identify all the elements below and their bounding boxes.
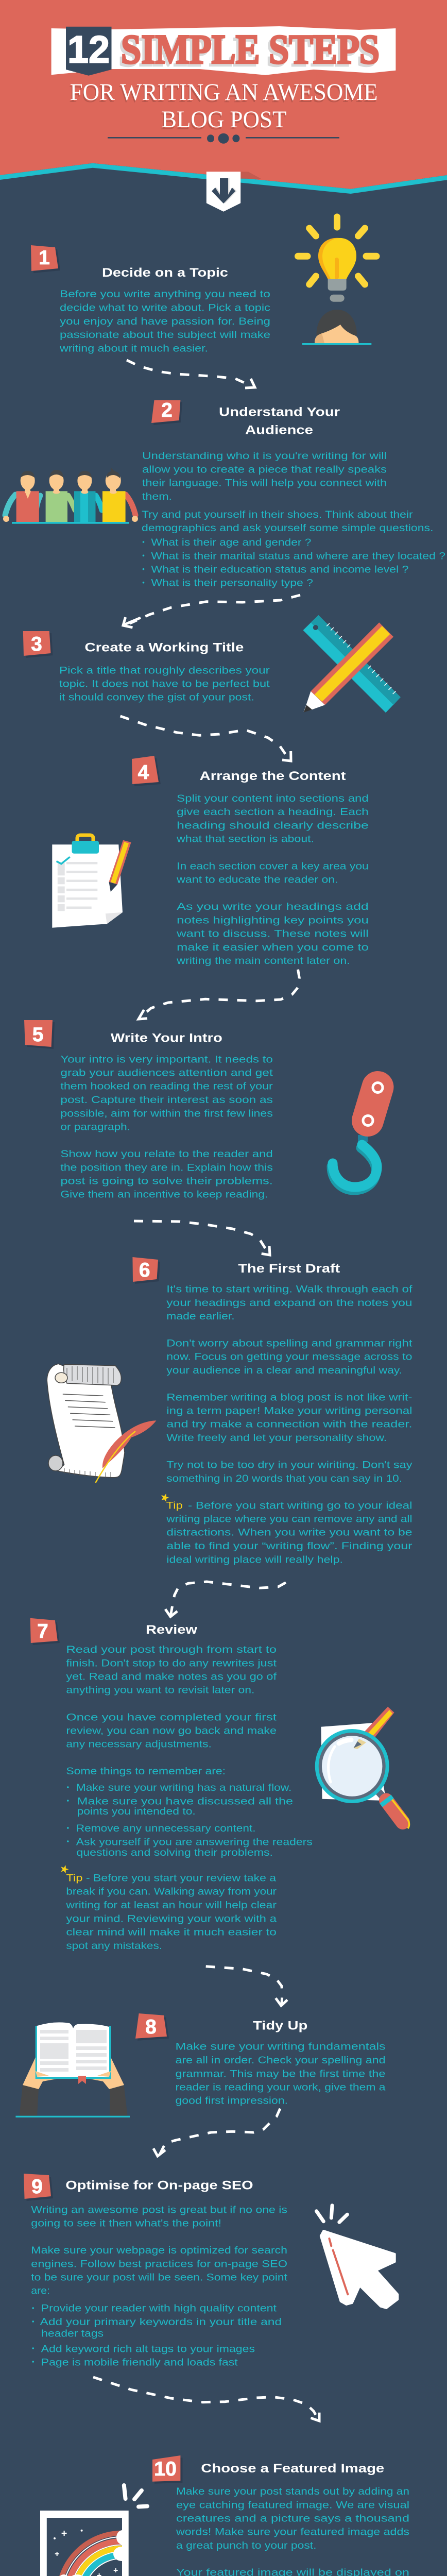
body 1: you enjoy and have passion for. Being — [60, 316, 270, 327]
body 9: Make sure your webpage is optimized for search — [31, 2245, 287, 2256]
badge 5: 5 — [32, 1024, 43, 1046]
body 4: want to educate the reader on. — [176, 874, 338, 886]
body 6: Write freely and let your personality show. — [166, 1432, 387, 1444]
body 6 — [166, 1283, 412, 1484]
heading 10: Choose a Featured Image — [201, 2462, 384, 2476]
body 5: them hooked on reading the rest of your — [60, 1081, 273, 1092]
badge 6 — [132, 1257, 160, 1284]
header divider — [108, 133, 339, 144]
tip 7: clear mind will make it much easier to — [66, 1927, 277, 1938]
body 9: going to see it then what's the point! — [31, 2218, 221, 2229]
body 8: reader is reading your work, give them a — [175, 2081, 386, 2093]
body 7: yet. Read and make notes as you go of — [66, 1671, 277, 1683]
body 7: Remove any unnecessary content. — [76, 1823, 256, 1834]
body 4: As you write your headings add — [177, 901, 369, 912]
heading 2 — [219, 405, 340, 437]
body 9: Writing an awesome post is great but if no one is — [31, 2204, 287, 2215]
step 6: the first draft — [47, 1257, 412, 1565]
body 4: make it easier when you come to — [177, 942, 369, 953]
heading 5: Write Your Intro — [111, 1031, 222, 1045]
badge 4: 4 — [138, 761, 149, 784]
heading 2: Understand Your — [219, 405, 340, 419]
body 7: review, you can now go back and make — [66, 1725, 277, 1737]
heading 1: Decide on a Topic — [102, 266, 228, 280]
body 3: it should convey the gist of your post. — [59, 692, 254, 703]
body 3: topic. It does not have to be perfect but — [59, 679, 270, 690]
badge 3: 3 — [31, 633, 42, 655]
body 9: header tags — [41, 2328, 104, 2340]
step 9: optimise for on-page seo — [24, 2174, 398, 2368]
badge 2 — [151, 399, 182, 425]
tip 6: writing place where you can remove any and all — [166, 1514, 412, 1525]
body 4: Split your content into sections and — [177, 793, 369, 804]
arrow: step 3 to 4 — [121, 716, 291, 761]
arrow: step 1 to 2 — [127, 360, 255, 388]
icon: star — [160, 1492, 170, 1502]
heading 3: Create a Working Title — [84, 640, 244, 654]
step 3: create a working title — [23, 615, 401, 713]
icon: lightbulb over head — [298, 217, 376, 345]
icon: star — [59, 1864, 70, 1874]
body 2: What is their marital status and where are they located ? — [151, 550, 445, 562]
body 2: What is their education status and income level ? — [151, 564, 409, 575]
body 1: writing about it much easier. — [59, 343, 208, 354]
badge 8: 8 — [145, 2016, 157, 2038]
heading 7: Review — [146, 1623, 197, 1637]
body 3: Pick a title that roughly describes your — [59, 665, 270, 676]
subtitle: BLOG POST — [161, 106, 286, 133]
badge 10 — [152, 2455, 182, 2484]
subtitle: FOR WRITING AN AWESOME — [69, 81, 377, 108]
body 9: Provide your reader with high quality content — [41, 2303, 277, 2314]
body 10: a great punch to your post. — [176, 2540, 316, 2551]
icon: framed rainbow picture — [40, 2483, 149, 2576]
body 9: are: — [31, 2285, 50, 2297]
badge 10: 10 — [154, 2458, 177, 2480]
body 5: grab your audiences attention and get — [60, 1067, 273, 1079]
body 7: anything you want to revisit later on. — [66, 1685, 254, 1696]
icon: ruler and pencil — [303, 615, 401, 713]
title: simple steps: SIMPLE STEPS — [121, 27, 380, 72]
body 7: Make sure your writing has a natural flow. — [76, 1782, 291, 1793]
icon: mouse cursor — [316, 2206, 398, 2308]
badge 8 — [135, 2013, 169, 2041]
body 2: demographics and ask yourself some simple questions. — [142, 522, 434, 534]
body 7: any necessary adjustments. — [66, 1739, 212, 1750]
body 7: finish. Don't stop to do any rewrites just — [66, 1657, 277, 1669]
arrow: step 7 to 8 — [206, 1967, 287, 2006]
body 9: Page is mobile friendly and loads fast — [41, 2357, 238, 2368]
icon: open book held in hands — [15, 2022, 130, 2117]
arrow: step 4 to 5 — [139, 970, 299, 1019]
body 8: grammar. This may be the first time the — [175, 2068, 385, 2079]
step 10: choose a featured image — [40, 2455, 409, 2576]
badge 7: 7 — [37, 1620, 48, 1642]
badge 7 — [30, 1618, 60, 1645]
tip 6 — [160, 1492, 412, 1565]
body 5 — [60, 1054, 273, 1200]
body 1: passionate about the subject will make — [60, 329, 270, 341]
body 7: Read your post through from start to — [66, 1644, 277, 1655]
body 7 — [66, 1644, 313, 1858]
tip 7: - Before you start your review take a — [86, 1873, 276, 1884]
badge 1 — [31, 245, 60, 273]
body 2: their language. This will help you connect with — [142, 478, 387, 489]
arrow: step 2 to 3 — [123, 595, 300, 628]
down arrow tag — [207, 172, 261, 212]
body 6: something in 20 words that you can say in 10. — [166, 1473, 402, 1484]
body 7: questions and solving their problems. — [76, 1847, 273, 1858]
heading 4: Arrange the Content — [200, 769, 346, 783]
body 9 — [31, 2204, 288, 2368]
body 7: points you intended to. — [77, 1806, 196, 1817]
body 4: want to discuss. These notes will — [176, 928, 369, 939]
body 9: Add keyword rich alt tags to your images — [41, 2344, 255, 2355]
tip 7: break if you can. Walking away from your — [66, 1886, 277, 1897]
step 2: understand your audience — [3, 399, 445, 589]
tip 7: spot any mistakes. — [66, 1940, 162, 1952]
body 2: Understanding who it is you're writing for will — [142, 450, 387, 462]
body 9: to be sure your post will be seen. Some key point — [31, 2272, 288, 2283]
heading 6: The First Draft — [238, 1262, 340, 1276]
badge 6: 6 — [139, 1259, 150, 1281]
badge 2: 2 — [161, 399, 173, 421]
body 10: words! Make sure your featured image adds — [176, 2527, 409, 2538]
body 4: heading should clearly describe — [177, 820, 369, 831]
body 8: Make sure your writing fundamentals — [175, 2041, 386, 2053]
body 9: Add your primary keywords in your title and — [40, 2316, 282, 2328]
body 4: In each section cover a key area you — [177, 860, 369, 872]
step 1: decide on a topic — [31, 217, 376, 354]
body 5: possible, aim for within the first few lines — [60, 1108, 273, 1119]
heading 9: Optimise for On-page SEO — [65, 2178, 253, 2192]
body 4: give each section a heading. Each — [177, 806, 369, 818]
body 2: What is their age and gender ? — [151, 537, 312, 548]
body 5: post. Capture their interest as soon as — [60, 1094, 273, 1106]
body 6: ing a term paper! Make your writing personal — [166, 1405, 412, 1417]
body 2: Try and put yourself in their shoes. Think about their — [142, 509, 413, 520]
icon: hook — [332, 1083, 383, 1190]
body 8 — [175, 2041, 386, 2107]
body 4: writing the main content later on. — [176, 955, 350, 967]
body 2: What is their personality type ? — [151, 578, 313, 589]
body 5: post is going to solve their problems. — [60, 1176, 273, 1187]
body 6: made earlier. — [166, 1311, 235, 1322]
tip 7: Tip — [66, 1873, 83, 1884]
badge 3 — [23, 631, 53, 658]
badge 4 — [132, 756, 161, 786]
step 8: tidy up — [15, 2013, 386, 2117]
body 2: them. — [142, 491, 172, 502]
body 7: Ask yourself if you are answering the readers — [76, 1836, 313, 1848]
badge 5 — [24, 1020, 55, 1049]
body 6: Don't worry about spelling and grammar right — [166, 1337, 412, 1349]
number banner: 12 — [67, 28, 110, 71]
body 4 — [176, 793, 369, 967]
icon: group of people — [3, 467, 138, 524]
subtitle — [69, 79, 378, 135]
tip 6: - Before you start writing go to your ideal — [188, 1500, 412, 1511]
tip 7 — [59, 1864, 277, 1952]
body 5: or paragraph. — [60, 1121, 130, 1132]
body 4: what that section is about. — [176, 834, 314, 845]
body 5: Your intro is very important. It needs to — [60, 1054, 273, 1065]
subtitle: BLOG POST — [161, 108, 286, 135]
badge 9: 9 — [31, 2176, 43, 2198]
body 6: Remember writing a blog post is not like writ- — [166, 1392, 412, 1403]
body 2 — [142, 450, 445, 589]
body 8: good first impression. — [175, 2095, 288, 2107]
body 6: Try not to be too dry in your wiriting. Don't say — [166, 1460, 412, 1471]
body 7: Some things to remember are: — [66, 1766, 226, 1777]
body 1: Before you write anything you need to — [60, 289, 270, 300]
tip 7: your mind. Reviewing your work with a — [66, 1913, 277, 1924]
body 10 — [176, 2486, 409, 2576]
body 2: allow you to create a piece that really speaks — [142, 464, 387, 475]
body 1: decide what to write about. Pick a topic — [60, 302, 270, 313]
icon: scroll and quill — [47, 1364, 156, 1483]
tip 6: able to find your “writing flow”. Finding your — [166, 1540, 412, 1552]
step 7: review — [30, 1618, 409, 1952]
title: simple steps: SIMPLE STEPS — [118, 30, 377, 75]
body 6: your headings and expand on the notes you — [166, 1297, 412, 1309]
body 6: It's time to start writing. Walk through each of — [166, 1283, 412, 1295]
body 6: now. Focus on getting your message across to — [166, 1351, 412, 1363]
body 5: Show how you relate to the reader and — [60, 1148, 273, 1160]
body 7: Once you have completed your first — [66, 1711, 277, 1723]
body 6: your audience in a clear and meaningful way. — [166, 1365, 402, 1376]
tip 6: Tip — [166, 1500, 183, 1511]
icon: clipboard checklist with pencil — [52, 835, 131, 928]
tip 6: ideal writing place will really help. — [166, 1554, 343, 1565]
subtitle: FOR WRITING AN AWESOME — [70, 79, 378, 106]
body 8: are all in order. Check your spelling and — [175, 2055, 385, 2066]
tip 7: writing for at least an hour will help clear — [65, 1900, 277, 1911]
badge 9 — [24, 2174, 53, 2201]
heading 8: Tidy Up — [253, 2019, 307, 2032]
header band — [0, 0, 447, 212]
arrow: step 5 to 6 — [134, 1221, 270, 1255]
body 5: Give them an incentive to keep reading. — [60, 1189, 268, 1200]
body 10: creatures and a picture says a thousand — [176, 2513, 409, 2524]
title ribbon — [51, 26, 396, 75]
body 5: the position they are in. Explain how this — [60, 1162, 273, 1173]
step 5: write your intro — [24, 1020, 383, 1200]
body 6: and try make a connection with the reader. — [166, 1419, 412, 1430]
body 1 — [59, 289, 270, 354]
body 7: Make sure you have discussed all the — [77, 1795, 293, 1807]
arrow: step 8 to 9 — [153, 2109, 280, 2156]
body 10: Make sure your post stands out by adding an — [176, 2486, 409, 2497]
step 4: arrange the content — [52, 756, 369, 967]
arrow: step 6 to 7 — [165, 1582, 286, 1617]
icon: magnifier over page with pencil — [315, 1707, 409, 1828]
body 9: engines. Follow best practices for on-page SEO — [31, 2258, 287, 2269]
body 10: eye catching featured image. We are visual — [176, 2499, 409, 2511]
heading 2: Audience — [245, 423, 313, 437]
tip 6: distractions. When you write you want to be — [166, 1527, 412, 1538]
body 4: notes highlighting key points you — [177, 914, 369, 926]
badge 1: 1 — [39, 247, 50, 269]
arrow: step 9 to 10 — [93, 2377, 319, 2421]
body 3 — [59, 665, 270, 703]
